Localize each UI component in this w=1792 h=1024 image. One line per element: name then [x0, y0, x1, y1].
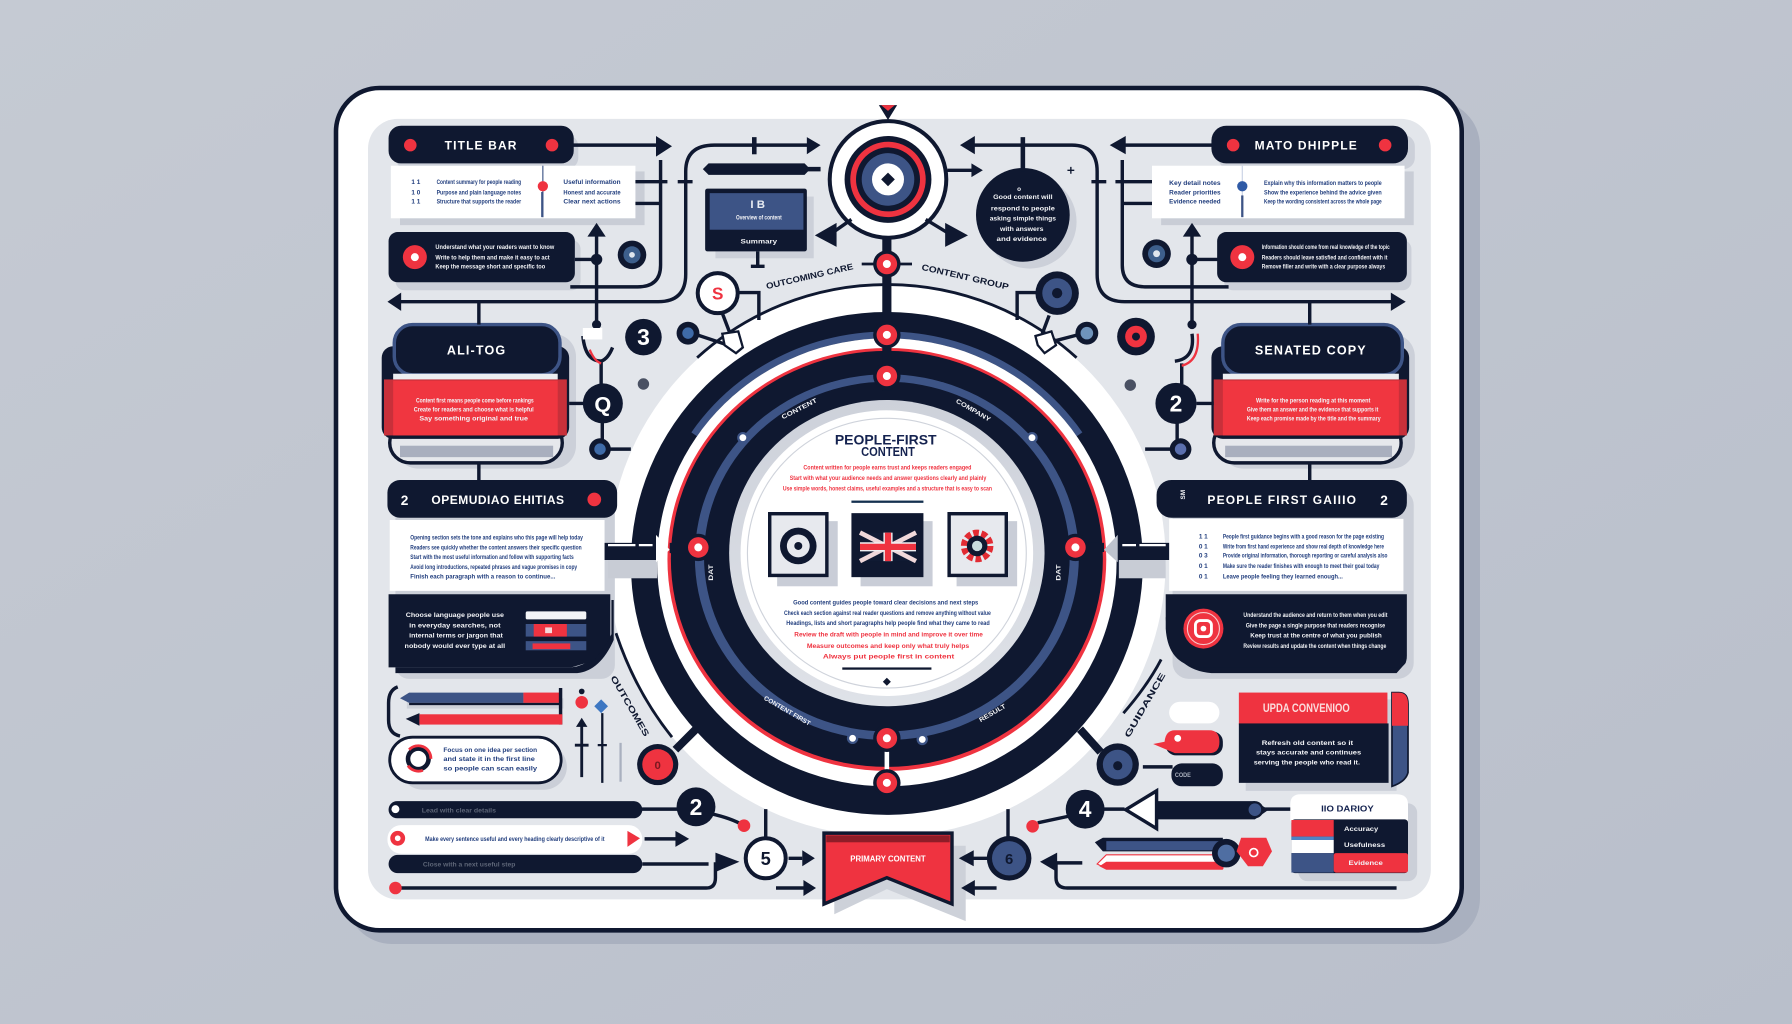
- badge: 5: [746, 838, 786, 878]
- panel: right main: 0 1: [1199, 563, 1208, 570]
- connector lines: top right: [974, 137, 1394, 482]
- pill: white: [387, 825, 642, 854]
- panel: small table: IIO DARIOY: [1321, 804, 1374, 813]
- panel: update card: [1239, 693, 1408, 791]
- connector lines: top left: [400, 137, 808, 482]
- panel: left main: Choose language people use: [406, 612, 504, 619]
- centre body text: Good content guides people toward clear decisions and next steps: [793, 600, 979, 607]
- badge: navy: [1017, 271, 1079, 334]
- panel: left main: internal terms or jargon that: [409, 633, 504, 640]
- panel: left main: in everyday searches, not: [409, 622, 502, 629]
- panel: small table: Accuracy: [1344, 826, 1379, 833]
- centre title: [835, 433, 937, 459]
- panel: senated copy: Give them an answer and the evidence that supports it: [1247, 406, 1379, 413]
- panel: right main: Review results and update the content when things change: [1243, 643, 1387, 650]
- central spine: [882, 194, 891, 784]
- panel: right main: Leave people feeling they learned enough...: [1223, 573, 1343, 580]
- badge: 4: [1066, 790, 1105, 829]
- icon: top target: [830, 105, 946, 238]
- panel: title table: Purpose and plain language notes: [437, 189, 522, 196]
- panel: senated copy: [1211, 325, 1415, 469]
- red dot: [738, 819, 750, 832]
- panel: right title bar: [1211, 126, 1415, 169]
- badge: 3: 3: [637, 324, 650, 350]
- panel: title table: Clear next actions: [563, 198, 621, 205]
- badge: 6: [987, 836, 1031, 881]
- panel: left main: OPEMUDIAO EHITIAS: [431, 493, 565, 507]
- badge: 3: [625, 319, 662, 355]
- panel: title table: 1 1: [411, 179, 421, 186]
- panel: right main: 0 1: [1199, 544, 1208, 551]
- panel: note right: Information should come from real knowledge of the topic: [1262, 244, 1390, 251]
- pill: dark code: [1171, 763, 1223, 786]
- panel: title table: 1 1: [411, 198, 421, 205]
- sliders: [575, 689, 621, 783]
- centre body text: Always put people first in content: [823, 653, 955, 660]
- panel: right main: Keep trust at the centre of what you publish: [1250, 633, 1382, 640]
- panel: right title bar: MATO DHIPPLE: [1255, 139, 1358, 153]
- pill: dark bottom: Close with a next useful step: [423, 861, 516, 868]
- panel: outer card: [336, 88, 1480, 944]
- panel: right main: 0 3: [1199, 553, 1208, 560]
- ring labels: [708, 397, 1063, 744]
- centre title: CONTENT: [861, 445, 915, 459]
- ring labels: DAT: [708, 564, 715, 581]
- badge: S: [698, 273, 759, 337]
- bars: lower left: [389, 687, 563, 736]
- panel: note right: Readers should leave satisfied and confident with it: [1262, 254, 1388, 261]
- arrows from target: [815, 163, 1074, 247]
- panel: note left: Understand what your readers want to know: [435, 244, 554, 251]
- pill: white: Make every sentence useful and every heading clearly descriptive of it: [425, 836, 605, 843]
- curved links and right badges: [1017, 271, 1198, 460]
- panel: update card: serving the people who read it.: [1254, 760, 1360, 767]
- icon: monitor: [705, 189, 814, 266]
- icon: target square: [770, 514, 838, 586]
- panel: small table: [1290, 794, 1417, 881]
- curved links and left badges: [583, 273, 759, 460]
- white arrow bar: [1126, 791, 1269, 829]
- panel: note left: Keep the message short and specific too: [435, 264, 545, 271]
- lines: bottom left: [395, 809, 806, 888]
- ribbon banner: [824, 833, 966, 921]
- centre body text: [784, 600, 991, 686]
- panel: small table: Evidence: [1349, 860, 1383, 867]
- panel: right main: PEOPLE FIRST GAIIIO: [1207, 493, 1357, 507]
- panel: left main: nobody would ever type at all: [405, 643, 505, 650]
- node: small navy: [677, 322, 725, 345]
- panel: left main: Start with the most useful information and follow with supporting facts: [410, 554, 574, 561]
- panel: title table: 1 0: [411, 189, 421, 196]
- panel: title bar: [389, 126, 578, 169]
- centre intro text: Start with what your audience needs and answer questions clearly and plainly: [790, 475, 987, 482]
- panel: right table: Reader priorities: [1169, 189, 1221, 196]
- panel: title table: Content summary for people reading: [437, 179, 521, 186]
- icon: gear square: [949, 514, 1017, 586]
- connector band: left: [605, 535, 693, 578]
- badge: 2: 2: [1170, 390, 1182, 416]
- panel: note left: Write to help them and make it easy to act: [435, 254, 550, 261]
- panel: left main: Readers see quickly whether the content answers their specific question: [410, 545, 582, 552]
- red dot right: [1026, 820, 1039, 833]
- arrowheads: bottom left: [675, 831, 816, 896]
- ring labels: DAT: [1056, 564, 1063, 581]
- pill: red bubble: [1153, 730, 1223, 755]
- centre body text: Check each section against real reader questions and remove anything without value: [784, 610, 991, 617]
- panel: title table: [391, 166, 645, 225]
- badge: 2 bottom: [677, 787, 715, 826]
- badge: Q: [583, 383, 623, 423]
- centre body text: Review the draft with people in mind and improve it over time: [794, 632, 983, 639]
- black pill above monitor: [703, 163, 821, 175]
- panel: right main: 0 1: [1199, 573, 1208, 580]
- arrowheads: bottom right: [959, 850, 1057, 896]
- ring labels: CONTENT FIRST: [762, 695, 812, 727]
- panel: senated copy: Write for the person reading at this moment: [1256, 397, 1371, 404]
- circle callout: asking simple things: [990, 216, 1056, 223]
- icon: monitor: I B: [750, 199, 765, 211]
- centre intro text: Content written for people earns trust and keeps readers engaged: [803, 465, 971, 472]
- panel: right main: Give the page a single purpose that readers recognise: [1246, 622, 1386, 629]
- arrowheads: top left: [387, 136, 821, 329]
- panel: right table: Evidence needed: [1169, 198, 1221, 205]
- connector band: right: [1083, 535, 1169, 578]
- pill: ring note: so people can scan easily: [443, 765, 538, 772]
- red dot start: [389, 882, 402, 894]
- arc label: lower left: OUTCOMES: [609, 674, 652, 738]
- centre content: [770, 433, 1017, 686]
- circle callout: Good content will: [993, 194, 1053, 201]
- panel: right main: SM: [1180, 490, 1187, 499]
- panel: left main: [387, 480, 617, 679]
- panel: right main: Write from first hand experience and show real depth of knowledge here: [1223, 544, 1384, 551]
- panel: left main: 2: [401, 493, 409, 508]
- panel: right main: 1 1: [1199, 533, 1208, 540]
- centre body text: Headings, lists and short paragraphs help people find what they came to read: [786, 620, 990, 627]
- icon: monitor: Summary: [741, 238, 778, 245]
- panel: left main: Avoid long introductions, repeated phrases and vague promises in copy: [410, 564, 577, 571]
- panel: right table: [1152, 166, 1414, 225]
- badge: 2 bottom: 2: [690, 794, 702, 820]
- icon: flag square: [851, 513, 933, 586]
- panel: right main: Make sure the reader finishes with enough to meet their goal today: [1223, 563, 1380, 570]
- icon: red shield: [1183, 609, 1223, 649]
- node: navy lower right: [1097, 743, 1139, 786]
- badge: S: S: [712, 283, 723, 303]
- node: white square: [722, 331, 743, 353]
- panel: note right: [1217, 232, 1411, 290]
- panel: ali-tog: Content first means people come before rankings: [416, 397, 534, 404]
- badge: 6: 6: [1005, 852, 1013, 868]
- panel: ali-tog: Say something original and true: [419, 416, 528, 423]
- ring labels: COMPANY: [954, 398, 992, 424]
- circle callout: [976, 168, 1077, 269]
- panel: right main: 2: [1380, 493, 1388, 508]
- pill: ring note: and state it in the first line: [443, 756, 535, 763]
- badge: 4: 4: [1079, 796, 1092, 822]
- panel: right table: Keep the wording consistent across the whole page: [1264, 198, 1382, 205]
- pill: ring note: Focus on one idea per section: [443, 747, 537, 754]
- pill: dark code: CODE: [1175, 772, 1191, 779]
- pills: bottom left: [387, 801, 642, 894]
- icon: monitor: Overview of content: [736, 214, 782, 221]
- panel: right main: Understand the audience and return to them when you edit: [1243, 612, 1388, 619]
- circle callout: with answers: [999, 226, 1044, 233]
- panel: update card: Refresh old content so it: [1262, 740, 1354, 747]
- panel: senated copy: Keep each promise made by the title and the summary: [1247, 416, 1381, 423]
- icon: navy dot right: [1142, 239, 1171, 268]
- panel: title table: Structure that supports the reader: [437, 198, 522, 205]
- pill: dark top: [389, 801, 642, 818]
- arrowheads: top right: [960, 136, 1406, 329]
- pill: plain white: [1169, 702, 1219, 723]
- panel: right table: Show the experience behind the advice given: [1264, 189, 1382, 196]
- centre intro text: [783, 465, 992, 503]
- arc label: left: OUTCOMING CARE: [765, 261, 854, 291]
- panel: right table: Key detail notes: [1169, 180, 1221, 187]
- panel: small table: Usefulness: [1344, 842, 1386, 849]
- node: white square right: [1035, 331, 1056, 353]
- arc label: right: CONTENT GROUP: [921, 262, 1010, 292]
- node: red lower left: [637, 744, 678, 785]
- circle callout: respond to people: [991, 205, 1055, 212]
- pencil bars: [1095, 838, 1272, 870]
- panel: ali-tog: [382, 325, 576, 469]
- panel: title table: Useful information: [563, 179, 621, 186]
- circle callout: and evidence: [997, 236, 1047, 243]
- panel: left main: Finish each paragraph with a reason to continue...: [410, 573, 556, 580]
- panel: title table: Honest and accurate: [563, 189, 621, 196]
- centre body text: Measure outcomes and keep only what truly helps: [807, 643, 970, 650]
- node: red lower left: 0: [655, 760, 661, 772]
- panel: ali-tog: ALI-TOG: [447, 343, 506, 357]
- icon: navy dot left: [618, 241, 646, 269]
- ribbon banner: PRIMARY CONTENT: [850, 855, 926, 864]
- panel: right main: Provide original information, thorough reporting or careful analysis also: [1223, 553, 1387, 560]
- ring nodes: [685, 250, 1089, 797]
- panel: update card: UPDA CONVENIOO: [1263, 701, 1350, 715]
- pill: dark top: Lead with clear details: [422, 808, 496, 815]
- panel: title bar: TITLE BAR: [445, 139, 518, 153]
- centre intro text: Use simple words, honest claims, useful examples and a structure that is easy to scan: [783, 485, 992, 492]
- panel: senated copy: SENATED COPY: [1255, 343, 1367, 357]
- badge: 2: [1155, 383, 1197, 424]
- arc label: lower right: GUIDANCE: [1122, 671, 1168, 739]
- panel: right main: People first guidance begins with a good reason for the page existing: [1223, 533, 1384, 540]
- node: small navy right: [1056, 322, 1098, 345]
- lines: bottom right: [971, 767, 1397, 888]
- panel: ali-tog: Create for readers and choose what is helpful: [414, 406, 534, 413]
- pill: ring note: [390, 737, 567, 790]
- badge: 5: 5: [761, 848, 771, 869]
- badge: red target: [1117, 318, 1155, 355]
- circle callout: o: [1017, 186, 1021, 193]
- panel: update card: stays accurate and continues: [1256, 749, 1362, 756]
- centre title: PEOPLE-FIRST: [835, 433, 937, 449]
- central rings: [608, 285, 1166, 837]
- ring labels: CONTENT: [781, 397, 818, 421]
- panel: left main: Opening section sets the tone and explains who this page will help today: [410, 534, 583, 541]
- panel: note right: Remove filler and write with a clear purpose always: [1262, 264, 1385, 271]
- panel: right table: Explain why this information matters to people: [1264, 180, 1382, 187]
- panel: note left: [389, 232, 581, 290]
- pill: dark bottom: [389, 855, 642, 873]
- panel: right main: [1157, 480, 1414, 679]
- ring labels: RESULT: [978, 703, 1007, 724]
- badge: Q: Q: [594, 391, 611, 416]
